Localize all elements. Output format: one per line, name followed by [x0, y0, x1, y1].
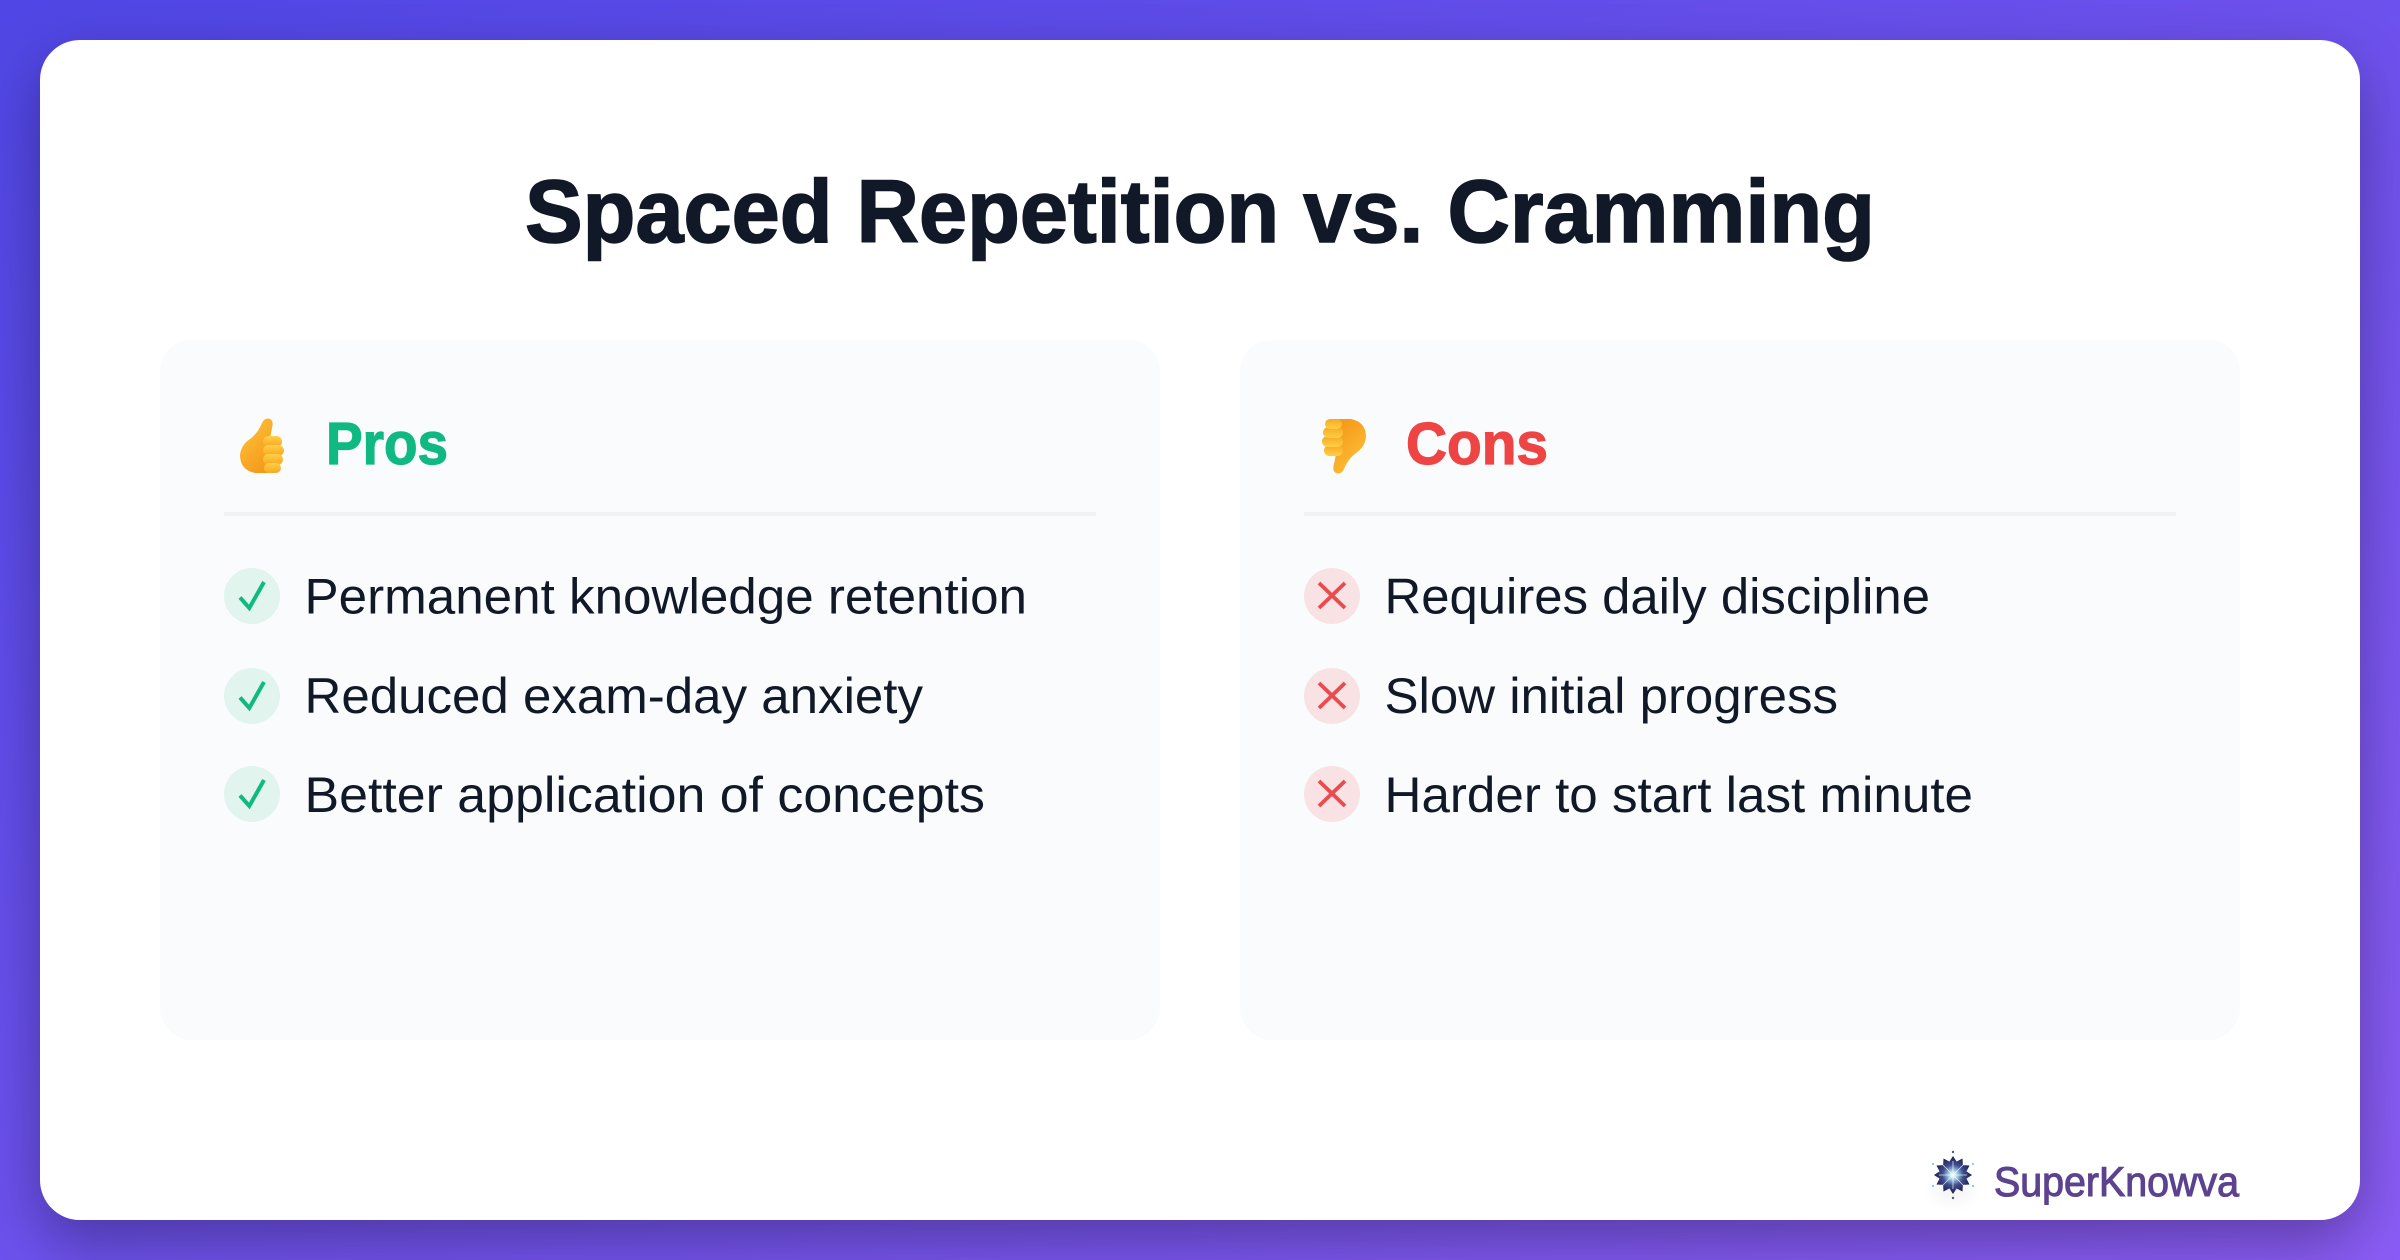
heading: cons: Cons	[1406, 411, 1548, 477]
logo: SuperKnowva	[1932, 1151, 2240, 1205]
item: requires daily discipline: Requires daily discipline	[1384, 568, 1930, 624]
icon: thumbs up	[240, 418, 284, 473]
icon: star emblem	[1932, 1151, 1974, 1201]
title: Spaced Repetition vs. Cramming	[525, 161, 1875, 261]
item: better application of concepts: Better application of concepts	[304, 767, 985, 823]
icon: thumbs down	[1322, 419, 1366, 474]
heading: pros: Pros	[326, 411, 448, 477]
item: permanent knowledge retention: Permanent knowledge retention	[304, 568, 1027, 624]
item: harder to start last minute: Harder to start last minute	[1384, 767, 1973, 823]
logo wordmark: SuperKnowva	[1994, 1158, 2240, 1205]
panel: cons	[1240, 340, 2240, 1040]
panel: pros	[160, 340, 1160, 1040]
item: reduced exam-day anxiety: Reduced exam-day anxiety	[304, 668, 923, 724]
item: slow initial progress: Slow initial progress	[1384, 668, 1838, 724]
